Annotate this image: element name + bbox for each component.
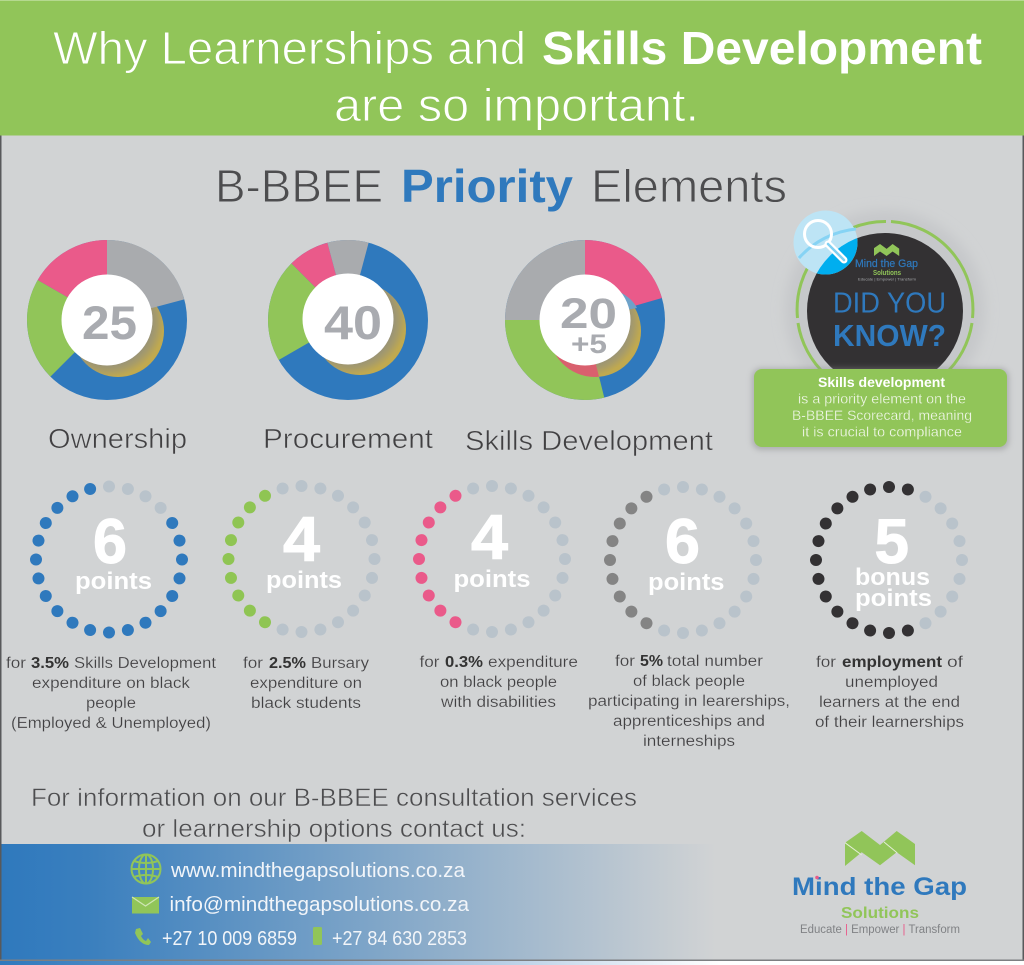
contact band [2,844,716,960]
icon: phone [135,928,151,945]
title: line one: Why Learnerships and [53,22,526,74]
dot ring: 6 points blue: 6 [93,507,127,577]
caption: 0.3% disabilities: for [420,654,440,671]
donut chart: procurement 40 [268,240,428,400]
callout: skills development: it is crucial to compliance [802,424,962,440]
title: line two: are so important. [334,79,699,131]
caption: 2.5% bursary: for [243,655,263,672]
title: line one [53,22,982,74]
green ring [797,221,973,375]
small logo [855,244,918,282]
dot ring: 4 points pink: points [454,566,530,593]
dot ring: 5 bonus points dark [810,481,968,639]
dot ring: 4 points pink: 4 [471,503,508,573]
small logo: Educate | Empower | Transform [858,276,917,282]
text: contact prompt: For information on our B-BBEE consultation services [31,784,637,812]
text: website: www.mindthegapsolutions.co.za [170,860,466,882]
logo: Mind the Gap Solutions: Educate | Empower | Transform [800,924,960,936]
caption: 5% learnerships: apprenticeships and [613,713,765,730]
caption: 5% learnerships: for [615,653,635,670]
caption: employment of learners: employment [842,654,942,671]
text: contact prompt: or learnership options contact us: [142,815,526,843]
caption: 3.5% skills development: people [86,695,136,712]
dot ring: 6 points grey: 6 [665,507,700,577]
donut chart: ownership 25 [27,240,187,400]
header banner [0,0,1024,136]
dot ring: 4 points green [222,480,380,638]
caption: employment of learners: unemployed [845,674,938,691]
caption: 3.5% skills development [6,655,217,732]
caption: employment of learners: for [816,654,836,671]
caption: 3.5% skills development: for [6,655,26,672]
caption: 5% learnerships: total number [667,653,763,670]
caption: 2.5% bursary [243,655,369,712]
dot ring: 5 bonus points dark: points [855,585,932,612]
caption: 0.3% disabilities: expenditure [488,654,578,671]
title: line one: Skills Development [542,22,982,74]
caption: 3.5% skills development: 3.5% [31,655,69,672]
callout: skills development: B-BBEE Scorecard, meaning [792,407,972,423]
caption: 0.3% disabilities: 0.3% [445,654,483,671]
logo: Mind the Gap Solutions: Solutions [841,905,919,922]
callout: skills development: is a priority element on the [798,390,966,406]
text: did you know: KNOW? [833,318,946,353]
label: Procurement: Procurement [263,423,433,454]
callout: skills development [754,369,1007,447]
caption: 2.5% bursary: Bursary [311,655,369,672]
callout: skills development: Skills development [818,374,945,390]
donut chart: procurement 40: 40 [324,296,382,349]
caption: employment of learners [815,654,964,731]
logo: Mind the Gap Solutions: Mind the Gap [792,873,967,901]
caption: 0.3% disabilities [420,654,578,711]
dot ring: 5 bonus points dark: bonus [855,564,930,591]
text: email: info@mindthegapsolutions.co.za [170,894,470,916]
dot ring: 6 points blue: points [75,568,152,595]
dot ring: 4 points green: 4 [283,505,320,575]
dot ring: 4 points green: points [266,567,342,594]
dot ring: 6 points blue [30,480,188,638]
caption: 5% learnerships: of black people [633,673,745,690]
label: Ownership: Ownership [48,423,187,454]
logo: Mind the Gap Solutions [792,831,967,936]
caption: employment of learners: of [947,654,964,671]
dot ring: 6 points grey [604,481,762,639]
caption: 5% learnerships: 5% [640,653,663,670]
caption: 0.3% disabilities: on black people [440,674,557,691]
logo mark [845,831,915,866]
donut chart: skills development 20 plus 5 [505,240,665,400]
icon: magnifier [794,210,858,274]
caption: 3.5% skills development: Skills Development [74,655,217,672]
caption: employment of learners: learners at the end [819,694,960,711]
label: Skills Development: Skills Development [465,425,713,456]
dot ring: 4 points pink [413,480,571,638]
heading: B-BBEE Priority Elements [215,160,787,212]
small logo: Mind the Gap [855,258,918,270]
icon: envelope [132,897,159,914]
heading: B-BBEE Priority Elements: B-BBEE [215,160,383,212]
caption: 2.5% bursary: expenditure on [250,675,362,692]
heading: B-BBEE Priority Elements: Priority [401,160,573,212]
text: did you know [833,288,946,353]
donut chart: ownership 25: 25 [82,296,137,349]
dot ring: 5 bonus points dark: 5 [874,507,909,577]
caption: 3.5% skills development: (Employed & Unemployed) [11,715,211,732]
donut chart: skills development 20 plus 5: +5 [571,329,607,359]
caption: 5% learnerships: interneships [643,733,735,750]
text: did you know: DID YOU [833,288,946,320]
caption: employment of learners: of their learnerships [815,714,964,731]
caption: 3.5% skills development: expenditure on black [32,675,190,692]
dark disc [807,233,963,389]
heading: B-BBEE Priority Elements: Elements [591,160,787,212]
caption: 5% learnerships: participating in learerships, [588,693,790,710]
text: landline: +27 10 009 6859 [162,928,297,950]
text: mobile number: +27 84 630 2853 [332,928,467,950]
donut chart: skills development 20 plus 5: 20 [560,290,617,338]
icon: globe [132,854,160,884]
text: contact prompt [31,784,637,843]
panel: did you know badge [752,210,1009,450]
caption: 2.5% bursary: black students [251,695,361,712]
caption: 0.3% disabilities: with disabilities [440,694,556,711]
dot ring: 6 points grey: points [648,569,724,596]
caption: 2.5% bursary: 2.5% [269,655,306,672]
small logo: Solutions [873,270,901,277]
icon: mobile [313,927,322,945]
caption: 5% learnerships [588,653,790,750]
